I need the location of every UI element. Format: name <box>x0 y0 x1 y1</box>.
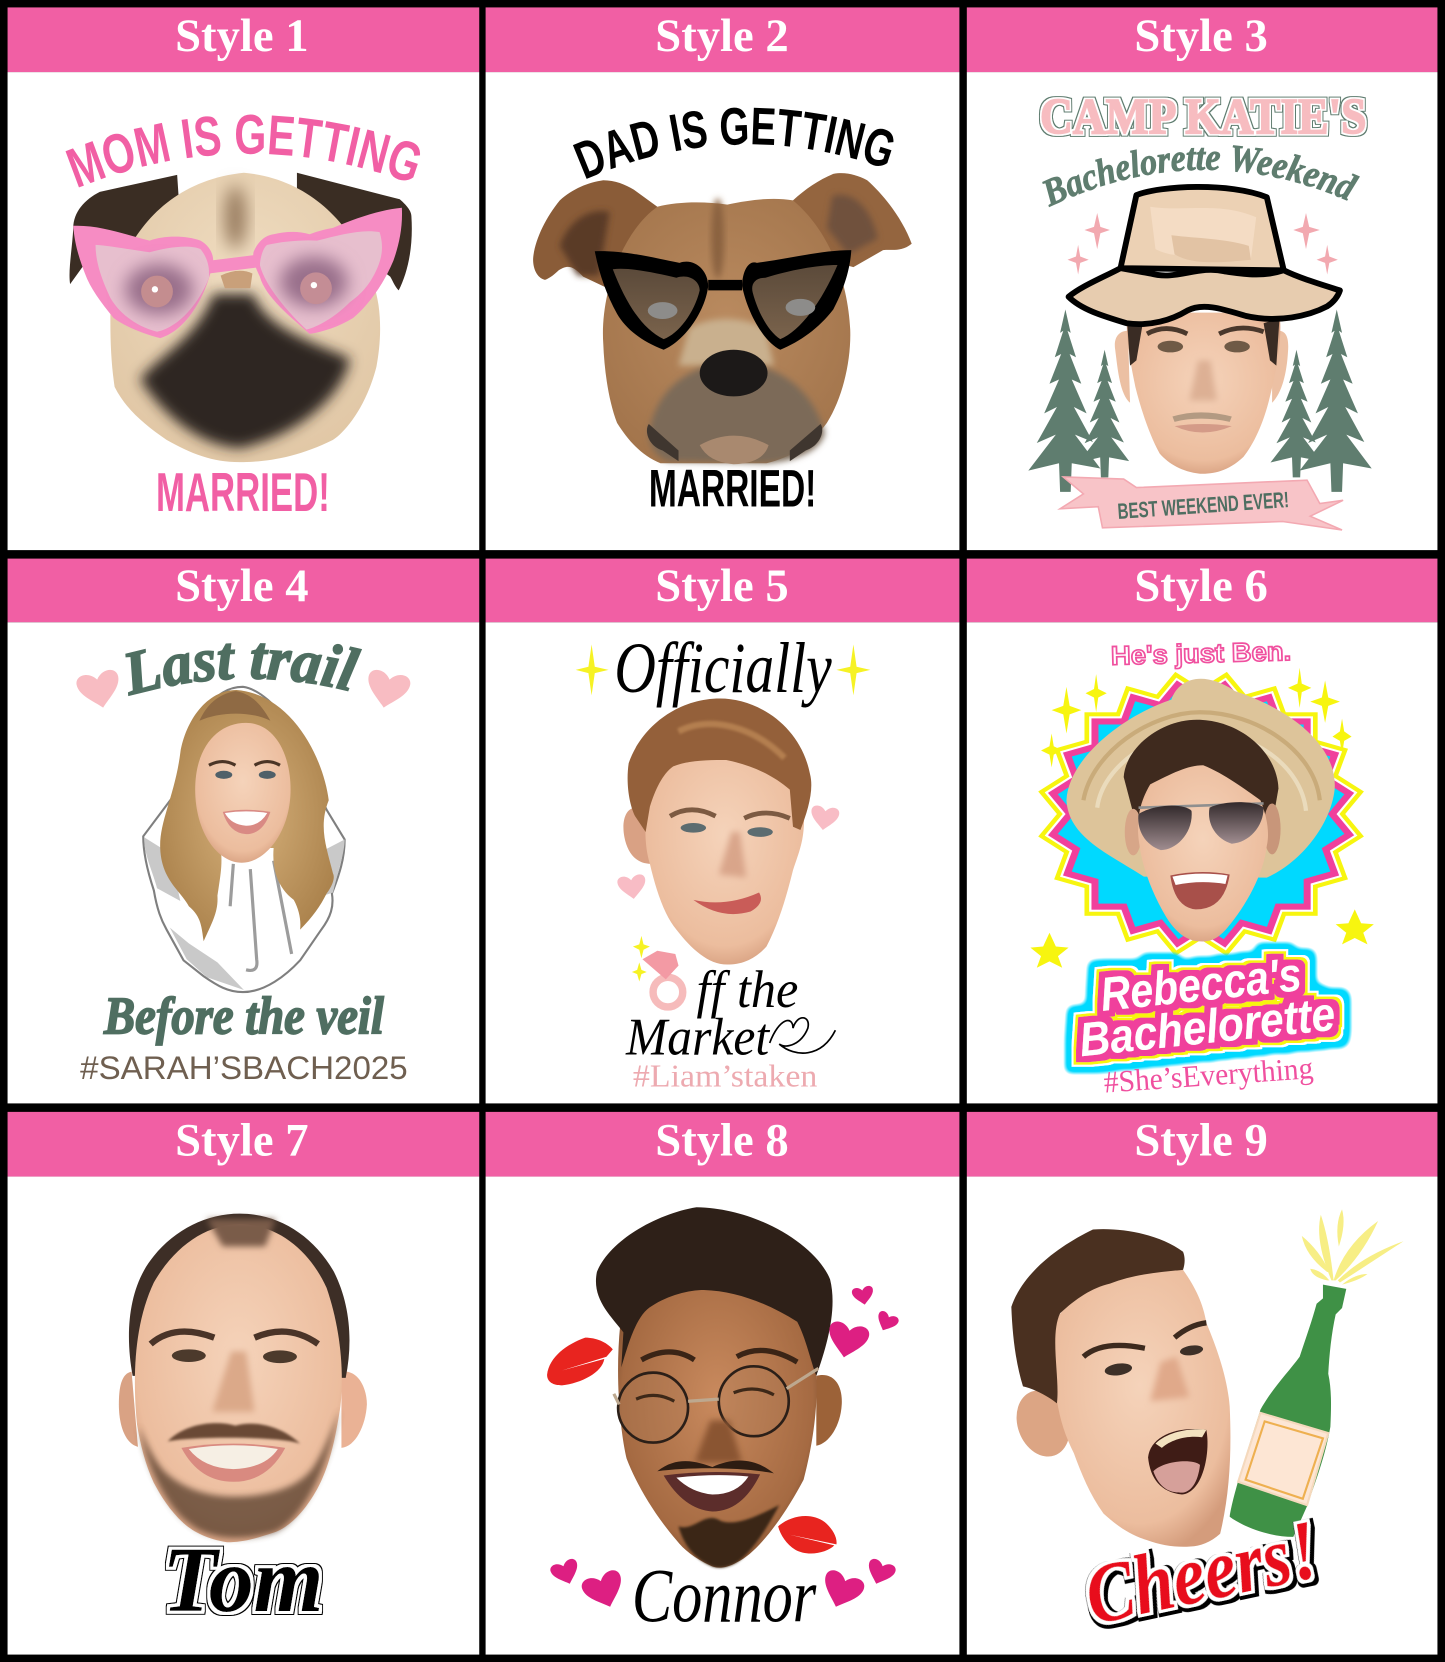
heading: Style 8: Style 8 <box>655 1114 789 1166</box>
panel: style 3 <box>966 7 1438 550</box>
heading: Style 7: Style 7 <box>175 1114 309 1166</box>
illustration: pug with pink heart glasses <box>70 173 412 462</box>
icon: pink hearts <box>75 668 412 712</box>
illustration: pine trees <box>1028 310 1372 492</box>
starburst background <box>1038 672 1364 956</box>
logo: rebecca's bachelorette: Rebecca's <box>1098 948 1304 1022</box>
panel: style 8 <box>486 1112 959 1655</box>
heading: Style 1: Style 1 <box>175 10 309 62</box>
icon: red lipstick kisses <box>547 1338 837 1554</box>
icon: diamond ring <box>642 951 683 1007</box>
illustration: woman with bridal veil <box>143 687 345 992</box>
heading: Style 3: Style 3 <box>1134 10 1268 62</box>
heading: Style 9: Style 9 <box>1134 1114 1268 1166</box>
icon: yellow sparkles <box>576 644 870 982</box>
hashtag: #She’sEverything <box>1103 1051 1314 1100</box>
script: off the market <box>625 961 798 1067</box>
illustration: man with glasses <box>596 1207 842 1568</box>
arched subtitle: Bachelorette Weekend <box>1042 145 1360 208</box>
script: off the market: Market <box>625 1009 770 1067</box>
heading: Style 6 <box>967 559 1437 622</box>
icon: yellow sparkles <box>1030 668 1374 968</box>
illustration: shouting man <box>1008 1229 1230 1547</box>
panel: style 7 <box>8 1112 479 1655</box>
slogan: before the veil: Before the veil <box>103 987 384 1045</box>
panel: style 9 <box>967 1112 1437 1655</box>
script: off the market: ff the <box>697 961 798 1019</box>
heading: Style 2: Style 2 <box>655 10 789 62</box>
heading: Style 7 <box>8 1112 479 1177</box>
arched slogan: dad is getting: DAD IS GETTING <box>572 108 894 179</box>
heading: Style 6: Style 6 <box>1134 560 1268 612</box>
panel: style 1 <box>8 7 480 550</box>
title: last trail: Last trail <box>125 643 362 696</box>
heading: Style 2 <box>486 7 959 72</box>
heading: Style 5 <box>486 559 959 622</box>
heading: Style 9 <box>967 1112 1437 1177</box>
illustration: dog with black heart glasses <box>533 173 912 464</box>
script title: officially: Officially <box>614 628 832 708</box>
illustration: winking man in straw hat and sunglasses <box>1066 679 1335 941</box>
arched slogan: mom is getting: MOM IS GETTING <box>66 114 420 188</box>
logo: rebecca's bachelorette: Bachelorette <box>1077 988 1338 1067</box>
heading: Style 1 <box>8 7 479 72</box>
illustration: man's face with tongue out <box>623 699 811 965</box>
heading: Style 4 <box>8 559 479 622</box>
heading: Style 4: Style 4 <box>175 560 309 612</box>
icon: magenta hearts <box>549 1285 900 1614</box>
panel: style 5 <box>486 559 959 1103</box>
illustration: man's face with bucket hat <box>1069 187 1340 474</box>
hashtag: #Liam’staken <box>633 1058 817 1093</box>
illustration: champagne bottle <box>1230 1285 1346 1537</box>
icon: small pink hearts <box>617 805 840 901</box>
name: Connor: Connor <box>632 1554 817 1639</box>
tagline: he's just Ben: He's just Ben. <box>1111 636 1291 671</box>
icon: pink sparkles <box>1068 213 1338 275</box>
name: Tom: Tom <box>162 1529 323 1632</box>
hashtag: #SARAH’SBACH2025 <box>80 1049 408 1086</box>
name: cheers: Cheers! <box>1077 1502 1327 1643</box>
illustration: bald smiling man <box>119 1214 367 1542</box>
banner: best weekend ever <box>1060 477 1343 530</box>
slogan: married: MARRIED! <box>156 461 330 523</box>
panel: style 6 <box>967 559 1437 1103</box>
heading: Style 5: Style 5 <box>655 560 789 612</box>
title: camp katie's: CAMP KATIE'S <box>1040 90 1366 146</box>
panel: style 2 <box>486 7 960 550</box>
logo: rebecca's bachelorette <box>1077 948 1338 1067</box>
panel: style 4 <box>8 558 480 1104</box>
banner: best weekend ever: BEST WEEKEND EVER! <box>1117 487 1290 524</box>
heading: Style 8 <box>486 1112 959 1177</box>
icon: yellow bubbly spray <box>1302 1209 1404 1285</box>
heading: Style 3 <box>967 7 1437 72</box>
icon: heart flourish <box>770 1018 835 1053</box>
slogan: married: MARRIED! <box>649 460 816 519</box>
